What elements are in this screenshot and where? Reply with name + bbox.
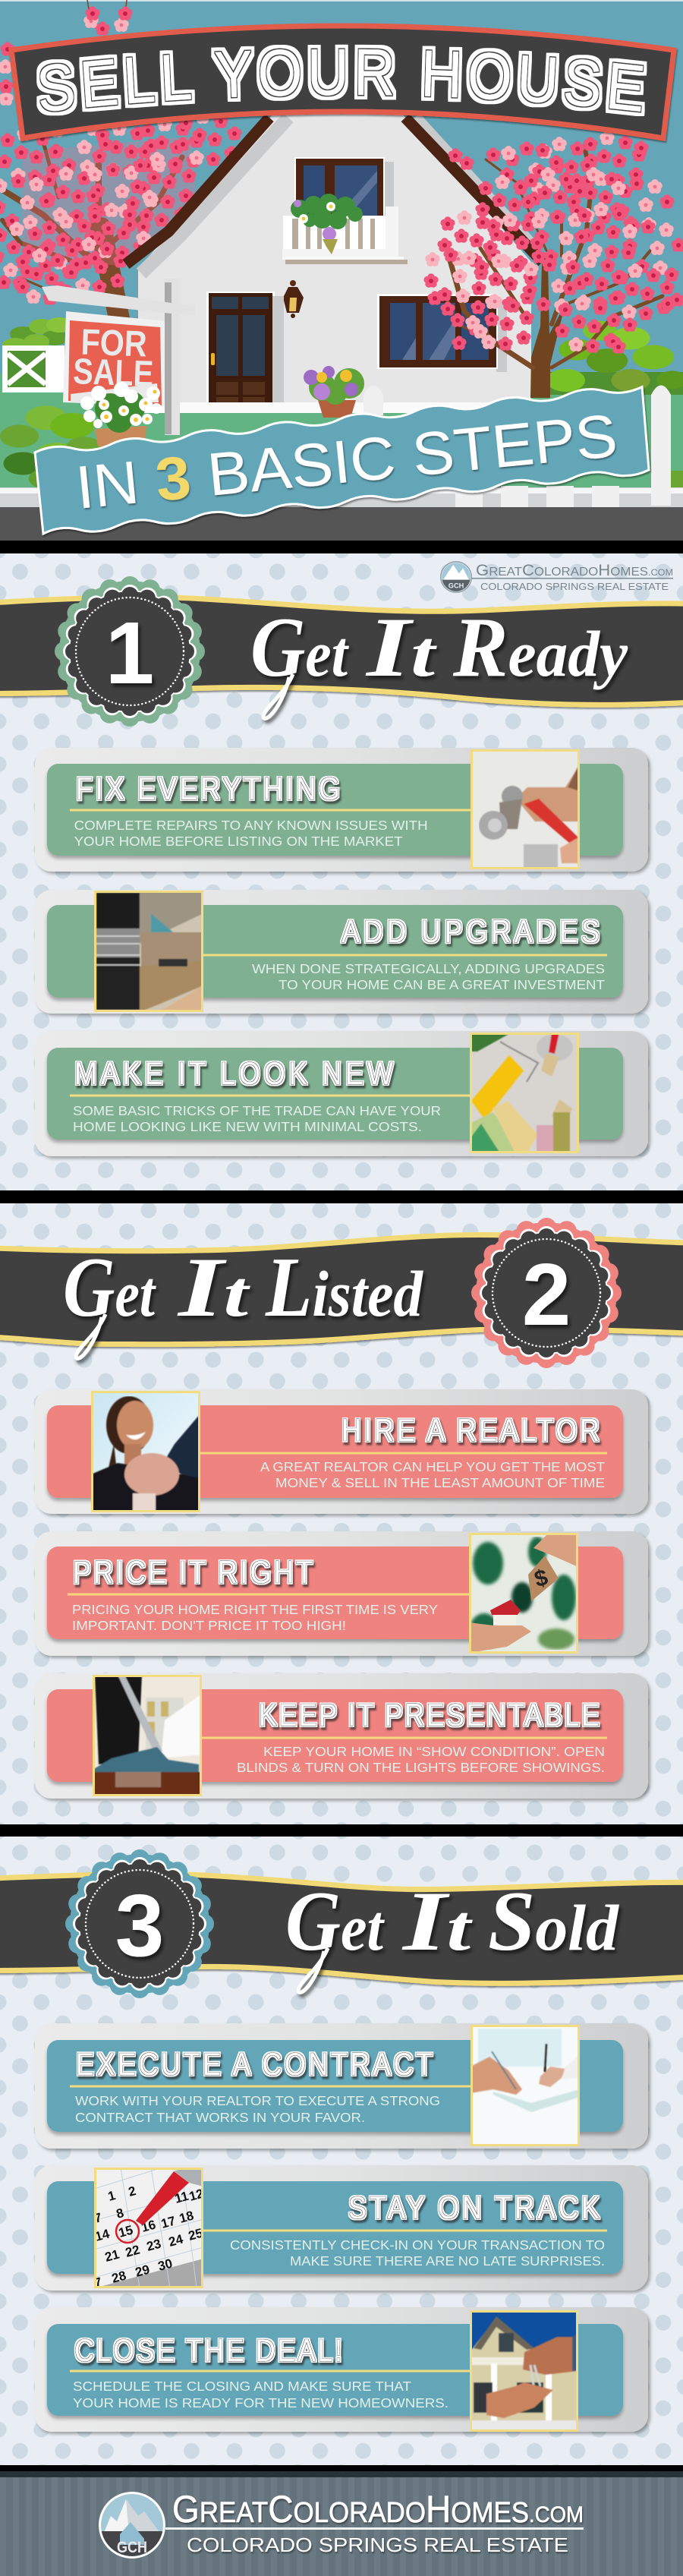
house	[126, 114, 543, 418]
description: WORK WITH YOUR REALTOR TO EXECUTE A STRONG	[75, 2093, 440, 2108]
band	[47, 1547, 623, 1639]
red panel	[68, 320, 162, 405]
heading script	[285, 1874, 620, 1992]
left tree	[0, 0, 242, 319]
card background	[35, 890, 648, 1014]
ribbon text: IN 3 BASIC STEPS	[73, 401, 620, 522]
band	[47, 2324, 623, 2416]
right bush lower	[671, 471, 683, 487]
footer tagline: COLORADO SPRINGS REAL ESTATE	[187, 2533, 568, 2556]
front left bush	[0, 405, 102, 489]
mountain base	[102, 2531, 162, 2556]
door	[206, 292, 284, 413]
ribbon	[0, 600, 683, 702]
card background	[35, 1673, 648, 1799]
logo name: GREATCOLORADOHOMES.COM	[476, 562, 673, 579]
basket flowers	[80, 382, 162, 446]
card background	[35, 2165, 648, 2291]
photo: vacuum	[93, 1675, 202, 1796]
photo: wrench	[471, 749, 580, 869]
heading: KEEP IT PRESENTABLE	[259, 1698, 600, 1733]
photo: calendar: 15	[117, 2223, 134, 2240]
footer	[0, 2471, 683, 2576]
banner shape	[11, 26, 674, 138]
description	[73, 2379, 449, 2410]
blossoms	[423, 131, 683, 354]
card background	[35, 1031, 648, 1156]
photo: calendar: 18	[178, 2209, 195, 2226]
description: YOUR HOME BEFORE LISTING ON THE MARKET	[74, 834, 403, 849]
subtitle ribbon	[35, 387, 649, 534]
sign text: SALE	[72, 352, 154, 395]
board	[63, 311, 165, 406]
sign tag	[71, 383, 159, 402]
heading: HIRE A REALTOR	[342, 1414, 600, 1449]
section background	[0, 1203, 683, 1824]
heading script: It	[176, 1241, 251, 1335]
footer stripes	[0, 2477, 683, 2576]
description: CONSISTENTLY CHECK-IN ON YOUR TRANSACTION TO	[230, 2237, 605, 2253]
description: SCHEDULE THE CLOSING AND MAKE SURE THAT	[73, 2379, 411, 2394]
number: 2	[522, 1245, 571, 1344]
card: price it right	[35, 1531, 648, 1656]
heading: EXECUTE A CONTRACT	[76, 2048, 433, 2083]
heading: ADD UPGRADES	[342, 915, 600, 950]
heading script: Ready	[452, 601, 628, 695]
description: A GREAT REALTOR CAN HELP YOU GET THE MOST	[260, 1459, 605, 1474]
description: CONTRACT THAT WORKS IN YOUR FAVOR.	[75, 2110, 365, 2125]
balcony plants	[291, 194, 363, 254]
photo: kitchen	[94, 891, 203, 1012]
right bush	[546, 320, 683, 395]
upper window	[294, 157, 394, 217]
description	[74, 818, 428, 849]
photo: calendar: 30	[156, 2256, 174, 2274]
ribbon	[0, 1877, 683, 1981]
photo: calendar: 12	[187, 2187, 205, 2204]
section background	[0, 553, 683, 1190]
card: make it look new	[35, 1031, 648, 1156]
left bush back	[2, 317, 72, 353]
footer logo	[99, 2492, 165, 2559]
description: KEEP YOUR HOME IN “SHOW CONDITION”. OPEN	[263, 1744, 605, 1759]
description: BLINDS & TURN ON THE LIGHTS BEFORE SHOWINGS.	[237, 1760, 605, 1775]
photo: calendar: 1	[106, 2188, 117, 2204]
lower window	[377, 294, 507, 372]
description	[260, 1459, 605, 1490]
photo: calendar: 25	[187, 2226, 204, 2243]
heading: MAKE IT LOOK NEW	[74, 1057, 393, 1092]
card background	[35, 1531, 648, 1656]
sign text: FOR	[80, 322, 148, 364]
stone	[364, 386, 383, 415]
lawn	[0, 374, 683, 491]
photo: calendar: 23	[145, 2237, 162, 2254]
band	[47, 905, 623, 998]
monogram: GCH	[117, 2539, 147, 2556]
description	[252, 961, 605, 992]
heading script	[250, 601, 628, 718]
post	[165, 279, 180, 435]
dark band	[0, 2471, 683, 2477]
roof shadow	[141, 118, 536, 273]
photo: calendar: 29	[134, 2262, 151, 2280]
badge 3	[70, 1854, 209, 1994]
badge 1	[59, 581, 200, 722]
small logo	[441, 562, 673, 592]
description: IMPORTANT. DON'T PRICE IT TOO HIGH!	[72, 1618, 346, 1633]
band	[47, 1048, 623, 1140]
lantern	[283, 280, 304, 318]
photo: house and money	[469, 1533, 578, 1654]
trunk and branches	[2, 0, 182, 319]
photo: house and money: $	[532, 1565, 551, 1592]
card background	[35, 1389, 648, 1514]
banner title	[39, 83, 647, 98]
heading: CLOSE THE DEAL!	[74, 2334, 342, 2369]
title banner	[8, 23, 678, 143]
description: TO YOUR HOME CAN BE A GREAT INVESTMENT	[279, 977, 605, 992]
heading: STAY ON TRACK	[348, 2191, 600, 2226]
section 2: get it listed	[0, 1203, 683, 1824]
description	[230, 2237, 605, 2269]
heading script: Get	[250, 601, 350, 695]
photo: calendar: 22	[124, 2243, 141, 2260]
top black divider	[0, 541, 683, 553]
description: MAKE SURE THERE ARE NO LATE SURPRISES.	[290, 2253, 605, 2269]
ribbon	[0, 1238, 683, 1342]
wall	[138, 114, 531, 406]
heading script: It	[364, 601, 438, 695]
title banner: SELL YOUR HOUSE	[36, 44, 647, 116]
photo: signing contract	[471, 2025, 580, 2146]
photo: calendar: 28	[110, 2269, 127, 2286]
heading script: Get	[285, 1874, 386, 1969]
photo: calendar: 24	[167, 2231, 185, 2250]
card background	[35, 2307, 648, 2432]
mountains	[103, 2499, 161, 2534]
sign text	[72, 322, 156, 395]
ribbon shape	[35, 387, 649, 534]
photo: calendar: 11	[173, 2189, 190, 2206]
card: add upgrades	[35, 890, 648, 1014]
third black divider	[0, 1824, 683, 1837]
band	[47, 2181, 623, 2274]
description	[72, 1602, 438, 1633]
photo: calendar: 7	[93, 2210, 103, 2226]
card background	[35, 748, 648, 872]
description: MONEY & SELL IN THE LEAST AMOUNT OF TIME	[275, 1475, 605, 1490]
photo: calendar: 8	[115, 2206, 125, 2221]
logo tagline: COLORADO SPRINGS REAL ESTATE	[480, 581, 669, 592]
description	[237, 1744, 605, 1775]
description: HOME LOOKING LIKE NEW WITH MINIMAL COSTS.	[73, 1119, 422, 1134]
description	[73, 1103, 441, 1134]
section background	[0, 1837, 683, 2465]
right tree	[423, 131, 683, 398]
card: stay on track	[35, 2165, 648, 2291]
heading: PRICE IT RIGHT	[73, 1556, 313, 1591]
card: execute a contract	[35, 2023, 648, 2149]
base strip	[138, 402, 531, 413]
flower pot	[304, 366, 364, 418]
photo: calendar: 14	[93, 2226, 112, 2244]
logo mark	[441, 562, 471, 592]
badge 2	[476, 1222, 617, 1364]
photo: realtor	[91, 1391, 200, 1512]
house icon	[120, 2522, 144, 2545]
description: WHEN DONE STRATEGICALLY, ADDING UPGRADES	[252, 961, 605, 976]
number: 1	[105, 604, 154, 702]
blossoms	[0, 6, 242, 305]
card: fix everything	[35, 748, 648, 872]
bottom black divider	[0, 2465, 683, 2471]
heading script: Sold	[488, 1874, 620, 1969]
number: 3	[115, 1876, 164, 1975]
description: YOUR HOME IS READY FOR THE NEW HOMEOWNERS.	[73, 2395, 449, 2410]
description: COMPLETE REPAIRS TO ANY KNOWN ISSUES WITH	[74, 818, 428, 833]
card: hire a realtor	[35, 1389, 648, 1514]
card background	[35, 2023, 648, 2149]
band	[47, 1405, 623, 1498]
band	[47, 1689, 623, 1782]
photo: calendar: 2	[127, 2183, 137, 2199]
logo rule	[471, 578, 673, 579]
heading script: Listed	[265, 1241, 424, 1335]
heading script: Get	[63, 1241, 157, 1335]
card: keep it presentable	[35, 1673, 648, 1799]
section 3: get it sold	[0, 1837, 683, 2465]
left white fence	[5, 346, 64, 392]
for sale sign	[42, 279, 195, 446]
road	[0, 507, 683, 541]
second black divider	[0, 1190, 683, 1203]
arm	[42, 285, 195, 314]
trunk and branches	[444, 147, 663, 398]
header illustration	[0, 0, 683, 541]
band	[47, 764, 623, 856]
photo: house keys	[470, 2310, 578, 2432]
heading script: It	[401, 1874, 474, 1969]
heading script	[63, 1241, 424, 1358]
description: SOME BASIC TRICKS OF THE TRADE CAN HAVE YOUR	[73, 1103, 441, 1118]
description: PRICING YOUR HOME RIGHT THE FIRST TIME IS VERY	[72, 1602, 438, 1617]
section 1: get it ready	[0, 553, 683, 1190]
card: close the deal	[35, 2307, 648, 2432]
logo mark: GCH	[449, 582, 464, 590]
white picket fence	[455, 386, 671, 507]
heading: FIX EVERYTHING	[76, 772, 340, 807]
footer name: GREATCOLORADOHOMES.COM	[172, 2488, 584, 2530]
sky	[0, 0, 683, 541]
photo: calendar: 16	[140, 2218, 157, 2235]
photo: calendar: 17	[159, 2214, 177, 2231]
description	[75, 2093, 440, 2125]
photo: calendar: 7	[93, 2275, 103, 2291]
band	[47, 2040, 623, 2132]
balcony	[282, 207, 408, 264]
ground strip	[0, 487, 683, 507]
photo: calendar	[93, 2168, 205, 2291]
photo: calendar: 21	[103, 2247, 121, 2265]
photo: paint supplies	[470, 1033, 579, 1153]
roof	[126, 118, 543, 264]
